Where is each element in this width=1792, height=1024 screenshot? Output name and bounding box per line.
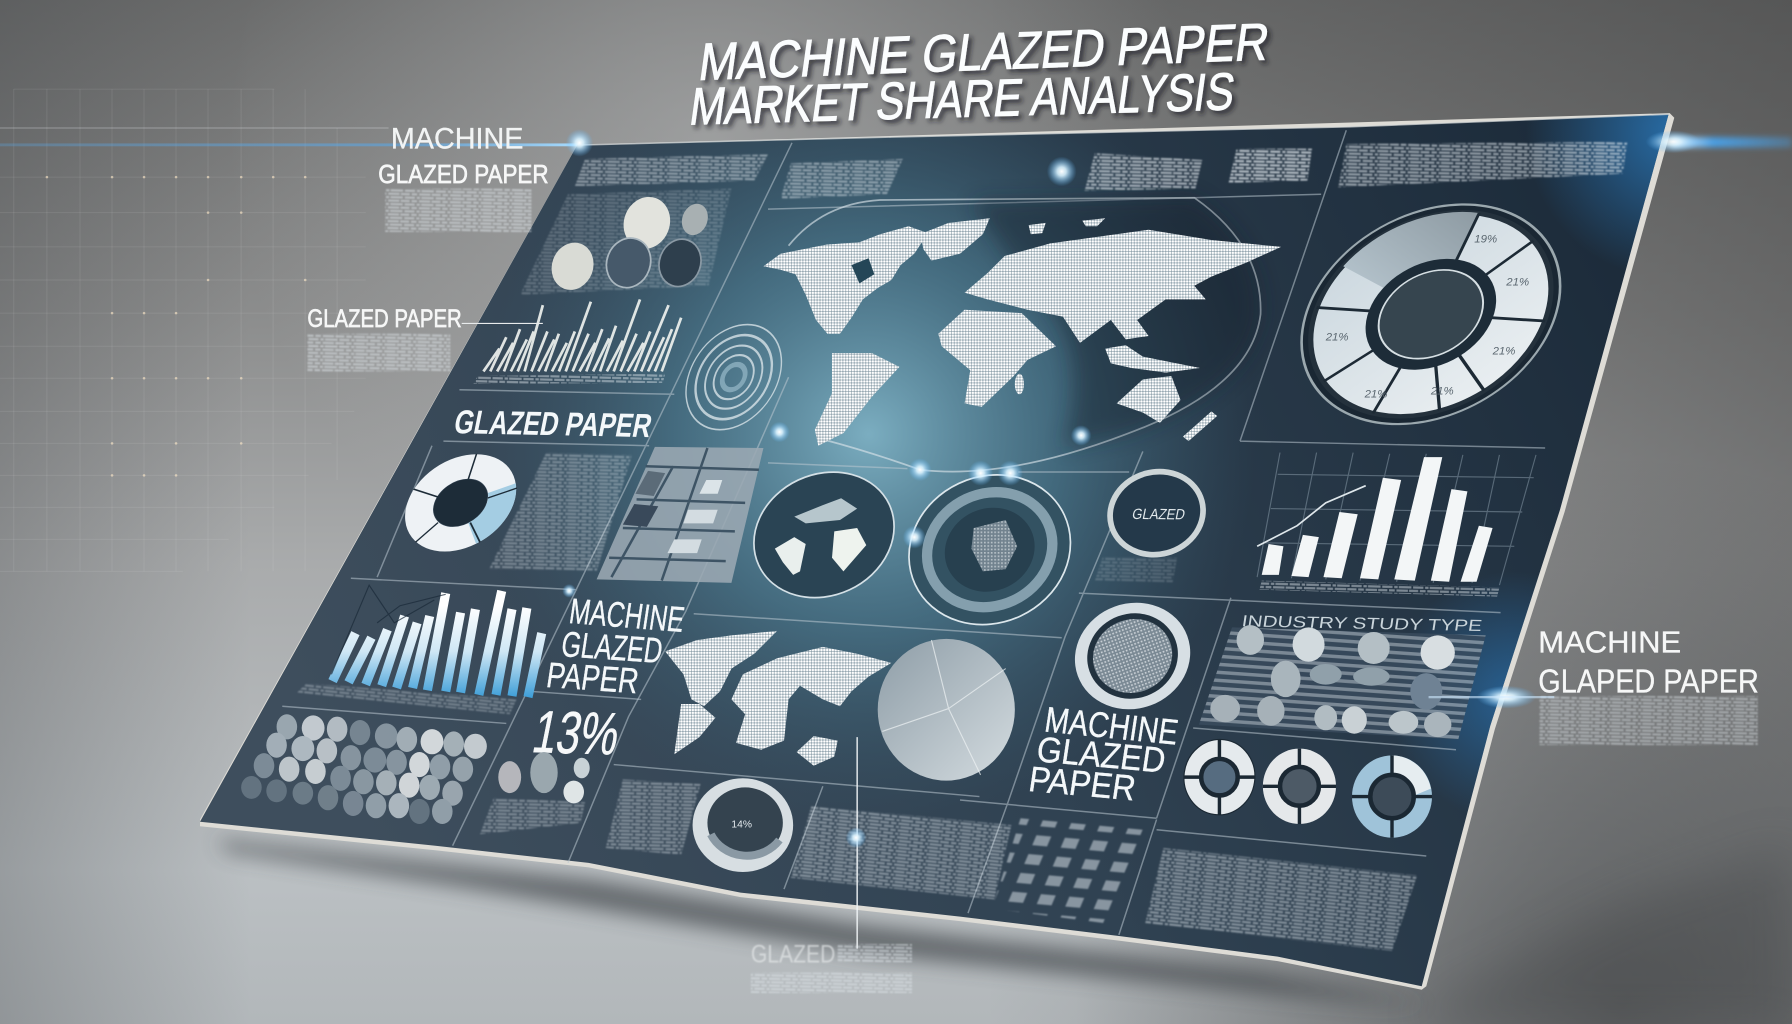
label line two: GLAPED PAPER bbox=[1538, 664, 1759, 701]
widget block bbox=[1229, 149, 1312, 183]
top strip widgets bbox=[781, 149, 1312, 199]
heading: machine glazed paper right: GLAZED bbox=[1034, 729, 1168, 781]
text block bbox=[791, 806, 1011, 899]
panel shadow bbox=[217, 840, 1792, 1024]
glass badge: GLAZED bbox=[1131, 506, 1187, 523]
text block bbox=[489, 453, 632, 571]
donut bbox=[1352, 755, 1432, 838]
wheel chart bbox=[1275, 202, 1587, 426]
donut bbox=[1179, 735, 1260, 819]
streak: top left bbox=[0, 143, 579, 146]
bar chart axis labels bbox=[297, 683, 517, 714]
section divider lines bbox=[282, 130, 1545, 935]
label line two: GLAZED PAPER bbox=[378, 159, 549, 189]
label text bbox=[307, 334, 450, 371]
new zealand bbox=[1183, 411, 1217, 441]
pie chart bbox=[878, 639, 1015, 781]
dark map backing bbox=[971, 198, 1261, 448]
map frame arc bbox=[789, 198, 1261, 472]
text block bbox=[606, 779, 701, 855]
text block bbox=[781, 159, 903, 199]
arctic islands bbox=[1029, 223, 1046, 234]
surface glows bbox=[542, 114, 1668, 800]
madagascar bbox=[1015, 374, 1024, 394]
ring gauge bbox=[693, 778, 793, 872]
text block bbox=[575, 154, 768, 186]
donut bbox=[1263, 749, 1336, 824]
table of image cells bbox=[597, 447, 763, 583]
text under badge bbox=[1095, 557, 1177, 583]
chart grid bbox=[1257, 453, 1536, 585]
three donuts bbox=[1179, 735, 1432, 838]
south america bbox=[815, 353, 899, 446]
flare on connector bbox=[846, 827, 866, 848]
coin bbox=[678, 200, 712, 239]
text block bbox=[1145, 848, 1417, 951]
label text bbox=[838, 944, 912, 962]
ring gauge: 14% bbox=[731, 819, 752, 830]
main world map bbox=[763, 198, 1281, 472]
streak: top right bbox=[1671, 137, 1792, 147]
top edge highlight bbox=[577, 114, 1669, 145]
label: right bbox=[1538, 625, 1759, 745]
small data grid bbox=[992, 818, 1143, 923]
coin bbox=[600, 232, 658, 294]
hex coins bbox=[1210, 625, 1455, 737]
trend line bbox=[1257, 486, 1366, 546]
label text bbox=[1539, 696, 1758, 745]
title bbox=[686, 13, 1273, 137]
small world map bbox=[665, 631, 891, 766]
wheel labels: 21% bbox=[1505, 277, 1529, 289]
glass badge bbox=[1101, 461, 1212, 565]
greenland bbox=[920, 218, 990, 261]
coin bbox=[616, 190, 677, 255]
spike chart bbox=[483, 299, 681, 371]
heading: machine glazed paper right: PAPER bbox=[1026, 759, 1138, 808]
title: MARKET SHARE ANALYSIS bbox=[686, 63, 1239, 137]
donut chart bbox=[396, 454, 528, 542]
heading: machine glazed paper: MACHINE bbox=[567, 591, 687, 640]
dashboard sheet bbox=[200, 113, 1674, 990]
wheel labels: 21% bbox=[1364, 389, 1387, 401]
heading: machine glazed paper bbox=[544, 591, 687, 701]
background grid with dots bbox=[0, 89, 389, 571]
striped image block bbox=[1199, 627, 1486, 739]
panel: industry study bbox=[1199, 612, 1486, 739]
heading: machine glazed paper right bbox=[1026, 700, 1181, 808]
title: MACHINE GLAZED PAPER bbox=[695, 13, 1273, 92]
flare: top left corner bbox=[566, 129, 593, 157]
section title: INDUSTRY STUDY TYPE bbox=[1241, 612, 1484, 635]
flare: right edge bbox=[1429, 686, 1554, 709]
globe two bbox=[884, 449, 1095, 651]
axis labels bbox=[1259, 581, 1499, 597]
wheel labels: 21% bbox=[1430, 385, 1454, 397]
wheel labels: 21% bbox=[1492, 345, 1515, 357]
glowing nodes bbox=[562, 422, 1091, 598]
panel: donut and text bbox=[396, 453, 632, 571]
connector bbox=[462, 322, 543, 324]
bar chart: right bbox=[1257, 453, 1536, 597]
panel: top-left coins bbox=[520, 154, 768, 296]
coin bbox=[652, 233, 708, 292]
coin grid bbox=[241, 714, 487, 824]
globe one bbox=[733, 450, 915, 620]
australia bbox=[1117, 376, 1181, 423]
africa bbox=[938, 310, 1056, 407]
label line one: MACHINE bbox=[391, 123, 523, 156]
heading: machine glazed paper right: MACHINE bbox=[1042, 700, 1181, 753]
label heading: GLAZED bbox=[751, 940, 835, 968]
wheel labels bbox=[1325, 233, 1529, 401]
hudson bay bbox=[851, 258, 874, 283]
flare: top right corner bbox=[1646, 130, 1701, 153]
sheet surface bbox=[200, 114, 1669, 986]
heading: machine glazed paper: PAPER bbox=[544, 655, 641, 701]
label text bbox=[751, 973, 912, 993]
wheel labels: 21% bbox=[1325, 332, 1349, 344]
label line one: MACHINE bbox=[1538, 625, 1681, 660]
fingerprint ring bbox=[1060, 587, 1205, 725]
arctic islands bbox=[1082, 218, 1105, 226]
target rings bbox=[674, 325, 793, 430]
north america bbox=[763, 226, 928, 334]
eurasia bbox=[965, 230, 1281, 343]
trend lines on bar chart bbox=[331, 585, 446, 674]
bars bbox=[1262, 457, 1493, 582]
sheet thickness and paper edge bbox=[200, 113, 1674, 990]
label: mid left bbox=[307, 305, 543, 371]
text block: top right bbox=[1338, 142, 1627, 187]
connector bbox=[856, 737, 858, 949]
blue bar chart bbox=[333, 591, 542, 697]
southeast asia islands bbox=[1105, 345, 1200, 373]
heading: machine glazed paper: GLAZED bbox=[559, 624, 665, 671]
label heading: GLAZED PAPER bbox=[307, 305, 462, 333]
text block bbox=[520, 189, 731, 295]
widget block bbox=[1085, 153, 1202, 191]
text under callout bbox=[480, 798, 585, 834]
small circles under callout bbox=[498, 752, 590, 803]
coin bbox=[545, 237, 600, 296]
chart axis labels bbox=[473, 374, 665, 384]
percentage callout: 13% bbox=[528, 699, 626, 767]
heading: glazed paper: GLAZED PAPER bbox=[451, 404, 655, 445]
label: bottom bbox=[751, 737, 912, 993]
label text bbox=[385, 189, 531, 232]
label: top left bbox=[378, 123, 549, 232]
wheel labels: 19% bbox=[1474, 233, 1497, 245]
glowing dot bbox=[1047, 157, 1077, 186]
